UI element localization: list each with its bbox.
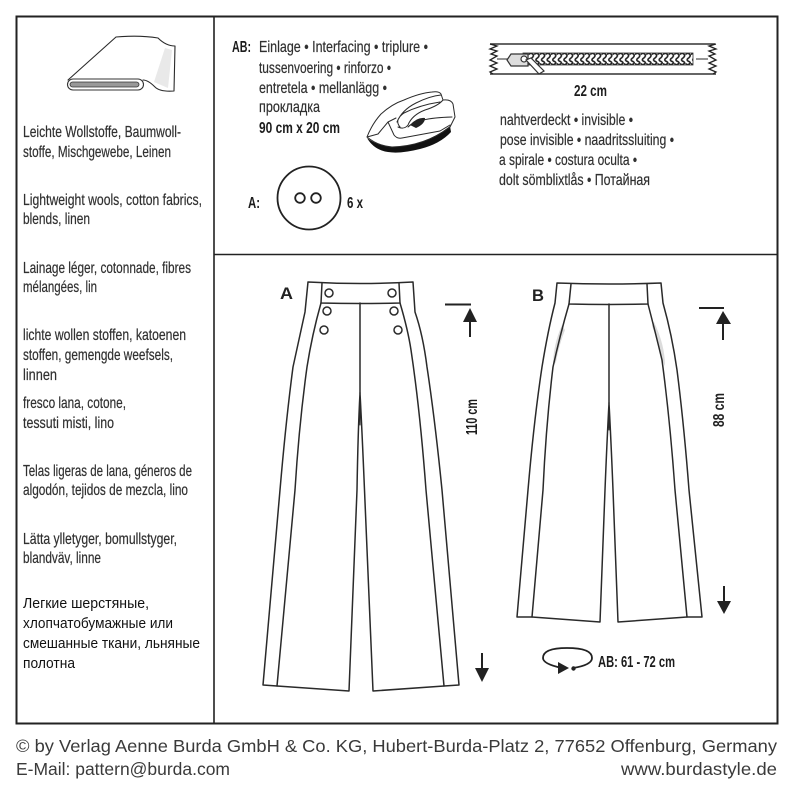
panel: notions xyxy=(232,39,716,230)
text: interfacing label: Einlage • Interfacing • triplure • xyxy=(259,39,428,56)
footer: website: www.burdastyle.de xyxy=(620,759,777,779)
trousers B drawing xyxy=(517,283,702,622)
text: interfacing label: 90 cm x 20 cm xyxy=(259,120,340,137)
text: Dutch fabrics xyxy=(23,327,186,384)
text: Russian fabrics: смешанные ткани, льняные xyxy=(23,635,200,652)
text: waist sizes: AB: 61 - 72 cm xyxy=(598,654,675,671)
text: English fabrics: Lightweight wools, cotton fabrics, xyxy=(23,192,202,209)
panel: fabric suitability xyxy=(23,36,202,672)
text: English fabrics xyxy=(23,192,202,228)
text: Swedish fabrics xyxy=(23,531,177,567)
text: interfacing label: AB: xyxy=(232,39,251,56)
text: German fabrics xyxy=(23,124,181,161)
text: Italian fabrics: tessuti misti, lino xyxy=(23,415,114,432)
text: Russian fabrics xyxy=(23,595,200,672)
text: zipper description: dolt sömblixtlås • Потайная xyxy=(499,171,650,189)
text: Spanish fabrics xyxy=(23,463,192,499)
text: button quantity label A: A: xyxy=(248,195,260,212)
text: Italian fabrics: fresco lana, cotone, xyxy=(23,395,126,412)
text: view A label: A xyxy=(280,284,293,303)
text: zipper description: pose invisible • naadritssluiting • xyxy=(500,132,674,149)
text: Dutch fabrics: linnen xyxy=(23,367,57,384)
text: French fabrics: mélangées, lin xyxy=(23,279,97,296)
text: Russian fabrics: Легкие шерстяные, xyxy=(23,595,149,612)
text: interfacing label: tussenvoering • rinforzo • xyxy=(259,60,391,77)
text: German fabrics: stoffe, Mischgewebe, Leinen xyxy=(23,144,171,161)
text: length 88 cm: 88 cm xyxy=(711,393,728,427)
icon: zipper xyxy=(490,44,716,74)
text: Spanish fabrics: Telas ligeras de lana, géneros de xyxy=(23,463,192,480)
text: button quantity: 6 x xyxy=(347,195,363,212)
text: zipper length: 22 cm xyxy=(574,83,607,100)
text: view B label: B xyxy=(532,286,544,305)
text: English fabrics: blends, linen xyxy=(23,211,90,228)
icon: iron xyxy=(367,92,455,153)
text: Swedish fabrics: Lätta ylletyger, bomullstyger, xyxy=(23,531,177,548)
arrow: top length marker A xyxy=(445,304,477,337)
text: German fabrics: Leichte Wollstoffe, Baumwoll- xyxy=(23,124,181,141)
text: Italian fabrics xyxy=(23,395,126,432)
text: interfacing label: entretela • mellanlägg • xyxy=(259,80,387,97)
arrow: bottom length marker A xyxy=(475,653,489,682)
text: interfacing label xyxy=(232,39,428,137)
pocket shading B xyxy=(553,322,665,366)
arrow: bottom length marker B xyxy=(717,586,731,614)
icon: waist measurement xyxy=(543,648,592,674)
text: length 110 cm: 110 cm xyxy=(464,399,481,435)
text: zipper description: nahtverdeckt • invisible • xyxy=(500,112,633,129)
panel: trousers B xyxy=(517,283,731,674)
text: zipper description xyxy=(499,112,674,189)
text: Dutch fabrics: lichte wollen stoffen, katoenen xyxy=(23,327,186,344)
text: French fabrics xyxy=(23,260,191,296)
icon: folded fabric xyxy=(68,36,175,91)
text: Dutch fabrics: stoffen, gemengde weefsels, xyxy=(23,347,173,364)
footer: publisher copyright: © by Verlag Aenne Burda GmbH & Co. KG, Hubert-Burda-Platz 2, 77652 Offenburg, Germany xyxy=(16,736,777,756)
footer: contact email: E-Mail: pattern@burda.com xyxy=(16,759,230,779)
text: Spanish fabrics: algodón, tejidos de mezcla, lino xyxy=(23,482,188,499)
text: zipper description: a spirale • costura oculta • xyxy=(499,152,637,169)
trousers A drawing xyxy=(263,282,459,691)
panel: trousers A xyxy=(263,282,489,691)
text: French fabrics: Lainage léger, cotonnade, fibres xyxy=(23,260,191,277)
text: Swedish fabrics: blandväv, linne xyxy=(23,550,101,567)
arrow: top length marker B xyxy=(699,308,731,340)
text: Russian fabrics: хлопчатобумажные или xyxy=(23,615,173,632)
text: Russian fabrics: полотна xyxy=(23,655,76,672)
icon: button xyxy=(278,166,340,230)
text: interfacing label: прокладка xyxy=(259,99,320,116)
